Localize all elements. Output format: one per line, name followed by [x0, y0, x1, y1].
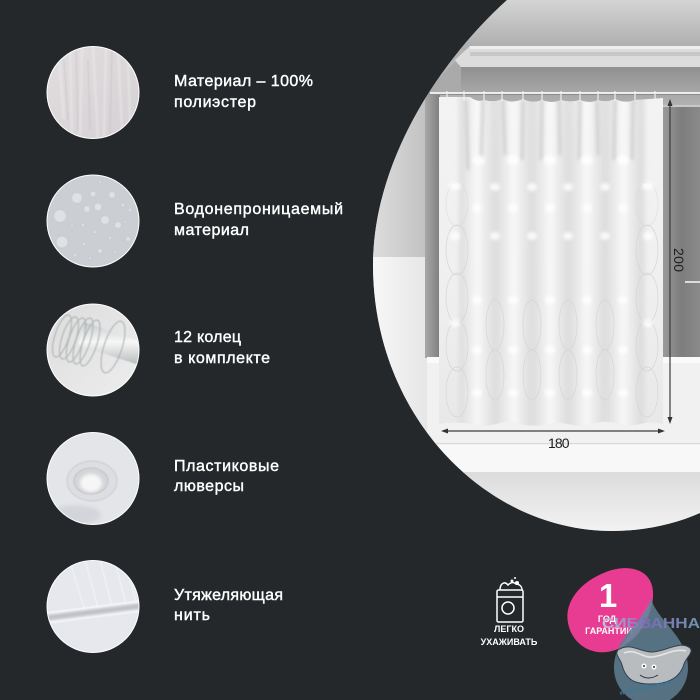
curtain	[439, 96, 663, 428]
upper wall	[461, 67, 700, 98]
text: weighted thread: Утяжеляющая	[174, 587, 283, 604]
logo url: www.sibvanna.ru	[618, 679, 672, 697]
logo wordmark: СИБВАННА	[602, 615, 700, 632]
feature 2: waterproof: материал	[174, 222, 249, 239]
lavender edge	[620, 600, 652, 648]
text: material: Материал – 100%	[174, 73, 313, 90]
feature 5: weighted thread: нить	[174, 607, 210, 624]
pink blob	[567, 568, 653, 652]
bathtub mascot	[617, 645, 691, 684]
feature 1: material: полиэстер	[174, 94, 256, 111]
swatch: polyester fabric	[45, 45, 141, 141]
text: rings: 12 колец	[174, 329, 241, 346]
dimension: width 180	[441, 428, 665, 451]
feature 2: waterproof	[45, 174, 343, 270]
icon: washing machine	[497, 577, 523, 622]
feature 4: grommets: люверсы	[174, 478, 244, 495]
dimension: height 200	[668, 99, 687, 424]
easy care badge	[481, 577, 538, 647]
left wall	[370, 92, 426, 260]
feature 4: grommets	[45, 431, 279, 527]
feature 3: rings	[45, 303, 270, 399]
swatch: rings on rod	[45, 303, 142, 399]
ceiling	[460, 0, 700, 50]
left tiled wall	[373, 257, 427, 432]
swatch: hem with thread	[45, 559, 141, 655]
dark wall strip	[425, 92, 440, 358]
swatch: plastic grommet	[45, 431, 141, 527]
bathroom photo with curtain	[370, 0, 700, 540]
fold shadows	[466, 100, 633, 170]
easy care badge: УХАЖИВАТЬ	[481, 637, 538, 647]
text: grommets: Пластиковые	[174, 458, 279, 475]
curtain folds	[459, 96, 645, 428]
label: easy care: ЛЕГКО	[494, 624, 524, 634]
warranty badge: ГАРАНТИИ	[585, 626, 633, 636]
swatch: water drops	[45, 174, 141, 270]
logo drop	[614, 598, 688, 700]
side wall near corner	[429, 62, 461, 92]
number one: 1	[599, 577, 617, 614]
shower rod	[430, 92, 700, 95]
label: year warranty: ГОД	[598, 614, 617, 624]
curtain pattern stars	[449, 155, 654, 397]
warranty badge	[567, 568, 653, 652]
bathtub	[427, 357, 700, 473]
text: waterproof: Водонепроницаемый	[174, 201, 343, 218]
feature 3: rings: в комплекте	[174, 350, 270, 367]
floor	[463, 472, 700, 531]
curtain pattern lenses	[446, 182, 658, 417]
moulding	[455, 46, 700, 67]
right wall	[663, 107, 700, 357]
dimension: height 200: 200	[671, 248, 687, 272]
feature 5: weighted thread	[45, 559, 283, 655]
feature 1: material	[45, 45, 313, 141]
dimension: width 180: 180	[548, 435, 570, 451]
photo base	[370, 0, 700, 540]
curtain rings	[447, 91, 655, 101]
watermark logo	[602, 598, 700, 700]
